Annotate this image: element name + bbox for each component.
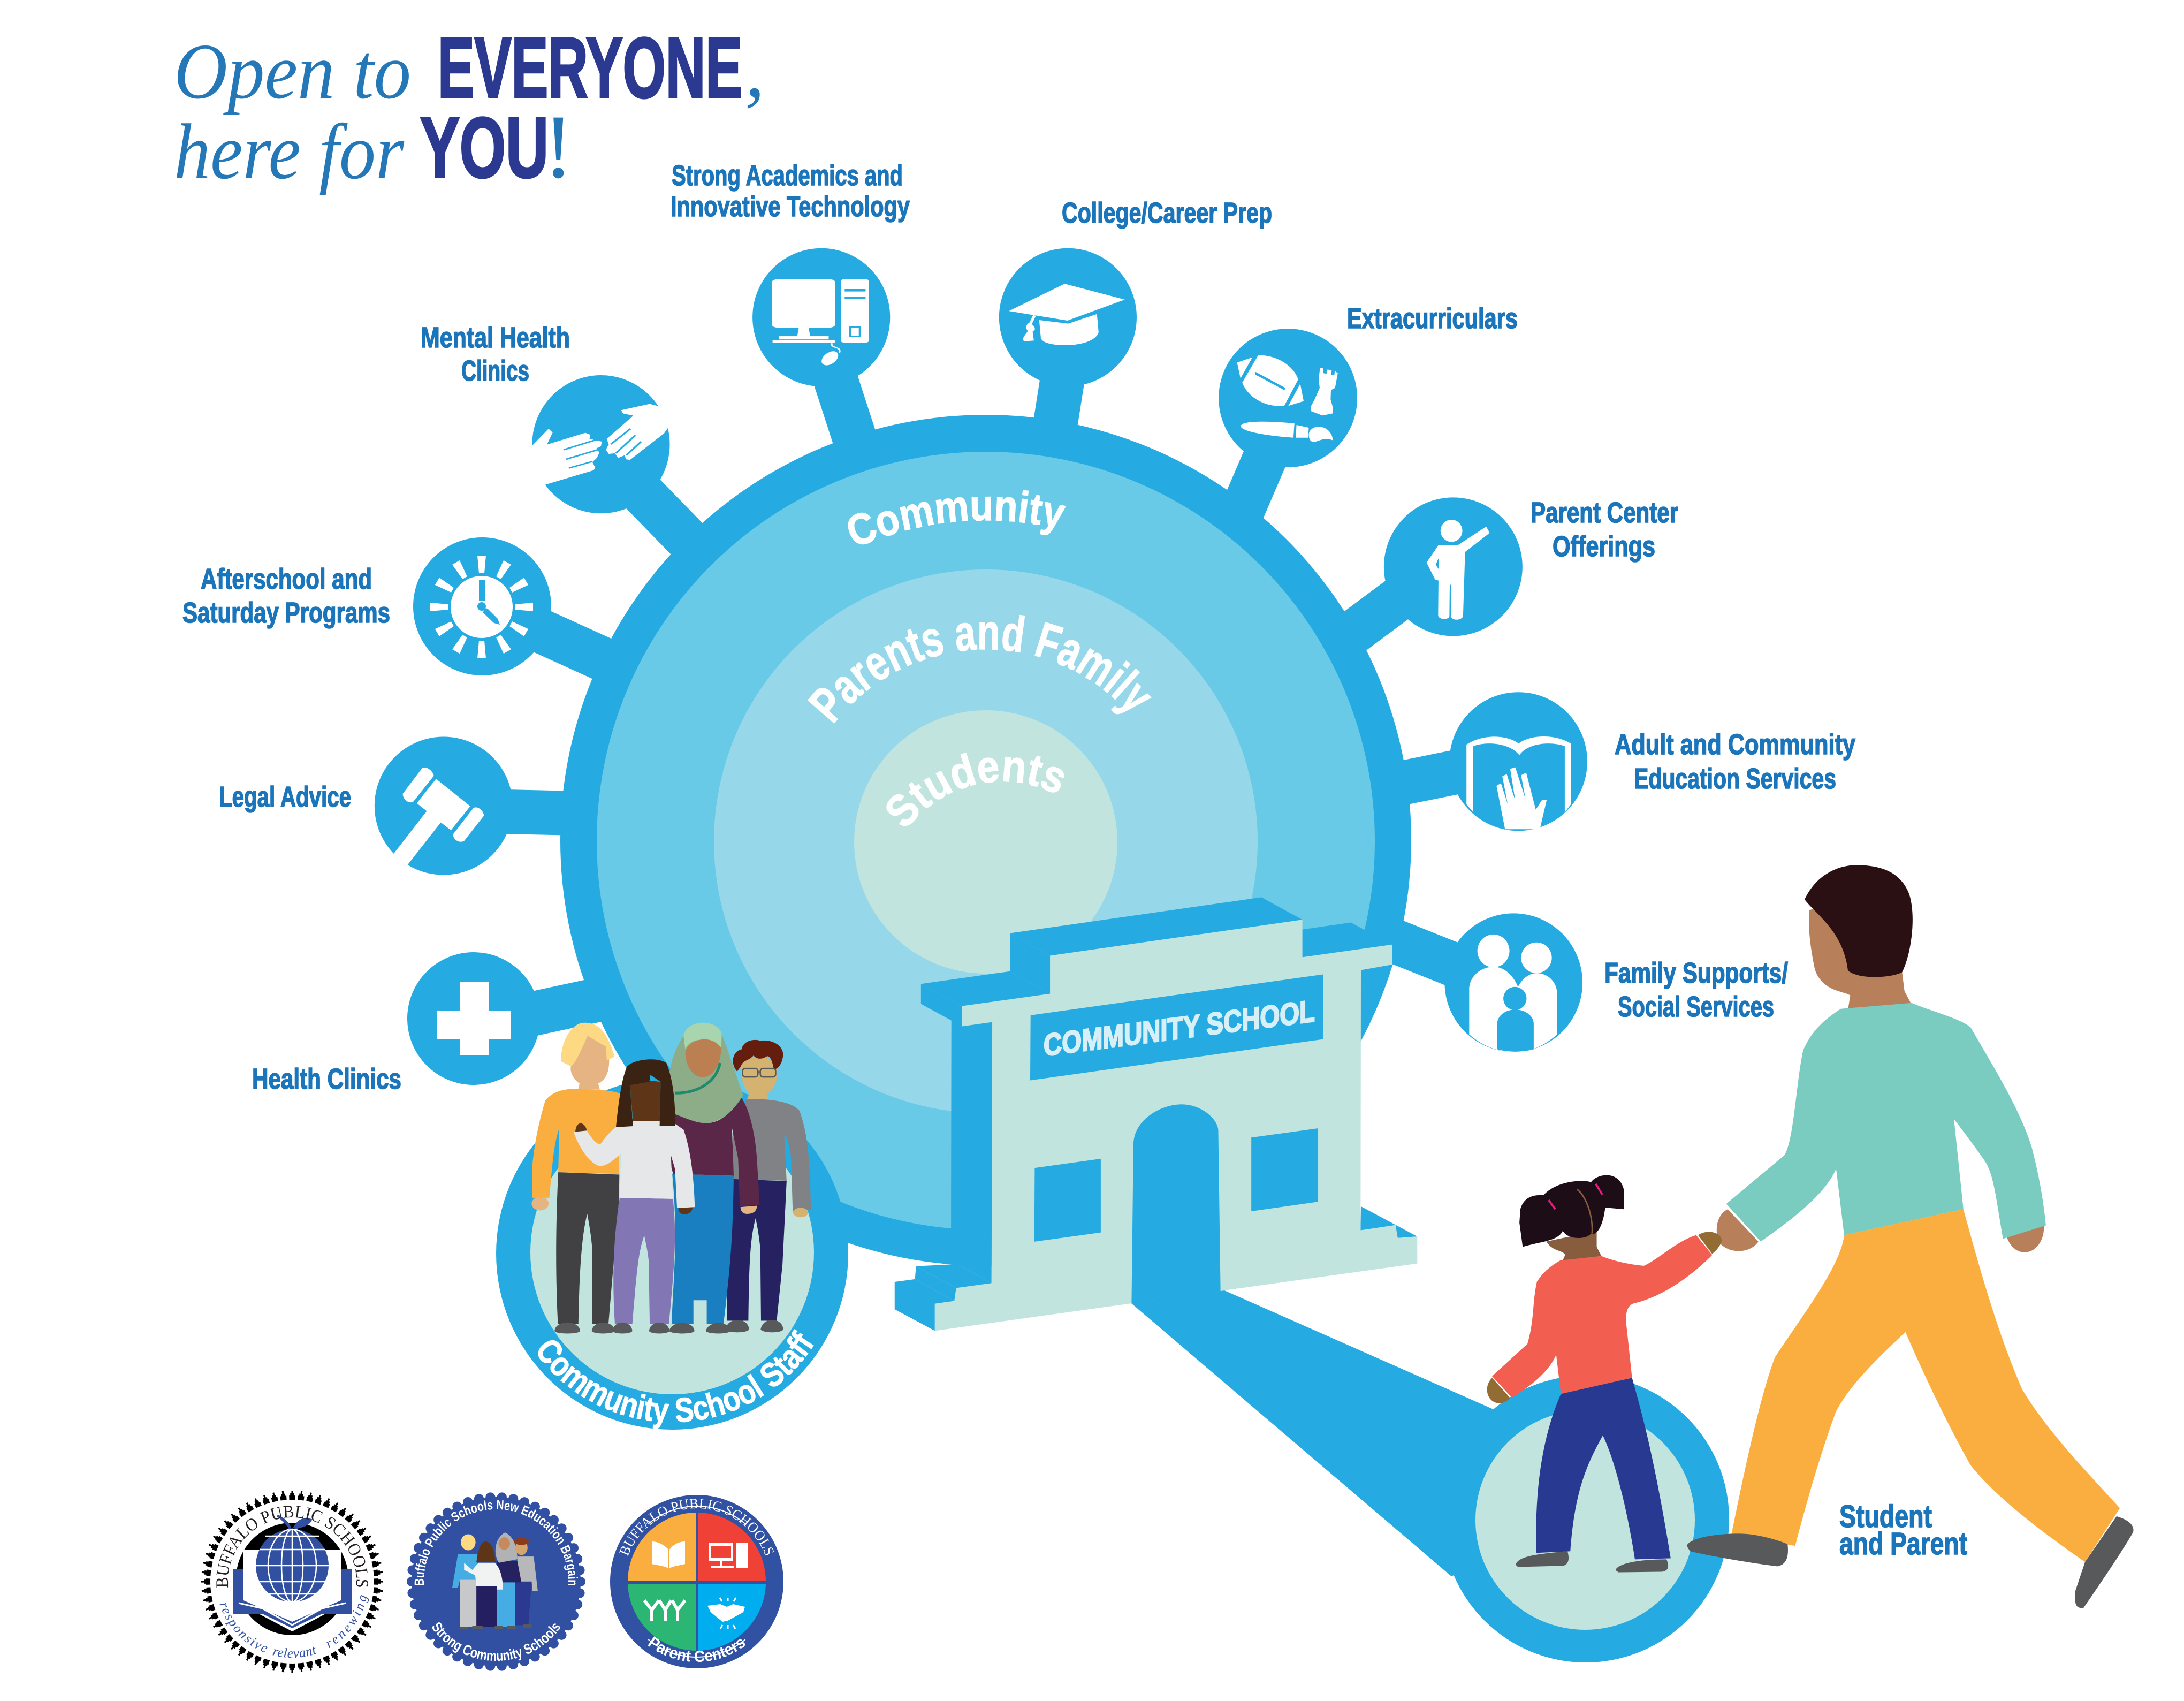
door <box>1131 1104 1221 1303</box>
outer ring <box>560 415 1411 1266</box>
icon: book and hand <box>1466 736 1571 829</box>
label: college career prep: College/Career Prep <box>1062 197 1272 229</box>
seal motto: responsive: responsive <box>219 1603 268 1652</box>
logo: strong community schools <box>407 1492 585 1671</box>
logo text: parent centers: Parent Centers <box>648 1636 745 1662</box>
building sign text: COMMUNITY SCHOOL <box>1044 993 1315 1063</box>
icon: family <box>1469 935 1557 1052</box>
label: strong academics: Strong Academics and <box>672 160 903 192</box>
label: legal advice: Legal Advice <box>219 781 351 813</box>
icon: person pointing <box>1427 520 1490 620</box>
logo text: buffalo public schools: BUFFALO PUBLIC SCHOOLS <box>619 1499 774 1556</box>
community school staff figures <box>531 1023 811 1333</box>
label: adult and community education services <box>1615 728 1855 795</box>
student and parent figures <box>1487 865 2134 1608</box>
title line 1 script: Open to <box>174 28 411 116</box>
icon: computer <box>772 279 869 367</box>
label: mental health clinics: Clinics <box>461 355 529 387</box>
quadrant: handshake <box>698 1584 766 1651</box>
label: student and parent: and Parent <box>1839 1527 1967 1561</box>
building banner <box>1030 974 1323 1081</box>
label: student and parent: Student <box>1839 1499 1932 1534</box>
icon: medical cross <box>437 982 511 1055</box>
community circle <box>597 452 1375 1230</box>
label: adult and community education services: Adult and Community <box>1615 728 1855 761</box>
label: adult and community education services: Education Services <box>1634 763 1836 795</box>
figure: woman in hijab <box>655 1023 759 1333</box>
label: community school staff: Community School Staff <box>538 1329 814 1429</box>
path from door to student circle <box>1131 1290 1586 1576</box>
community school building <box>895 897 1417 1331</box>
building blue side faces <box>895 897 1417 1331</box>
left window <box>1034 1159 1101 1242</box>
icon circle: mental health <box>525 375 670 513</box>
icon circle: family supports <box>1444 913 1582 1052</box>
icon circle: legal advice <box>375 737 513 876</box>
logo text: strong community schools: Strong Community Schools <box>432 1622 560 1661</box>
icon circle: adult and community education <box>1449 692 1587 831</box>
seal text: BUFFALO PUBLIC SCHOOLS <box>216 1506 368 1588</box>
logo: parent centers <box>610 1495 783 1668</box>
staff circle <box>496 1084 848 1430</box>
icon: reaching hands <box>525 404 669 485</box>
logo people <box>452 1532 538 1629</box>
icon circle: academics and technology <box>752 248 890 386</box>
figure: parent <box>1687 865 2134 1608</box>
logo: buffalo public schools seal <box>201 1491 383 1673</box>
concentric circles <box>560 415 1411 1266</box>
icon circle: health clinics <box>407 952 540 1085</box>
label: parent center offerings: Parent Center <box>1531 497 1678 529</box>
student circle <box>1442 1376 1729 1662</box>
title exclamation: ! <box>543 96 574 197</box>
label: student and parent <box>1839 1499 1967 1561</box>
figure: man in gray <box>726 1040 811 1332</box>
label: afterschool <box>182 563 390 629</box>
label: health clinics: Health Clinics <box>252 1063 401 1095</box>
right window <box>1251 1128 1318 1211</box>
seal motto: relevant: relevant <box>272 1646 317 1658</box>
seal motto: renewing: renewing <box>326 1595 369 1648</box>
icon circle: extracurriculars <box>1219 329 1357 467</box>
label: students: Students <box>886 753 1064 826</box>
label: afterschool: Saturday Programs <box>182 597 390 629</box>
quadrant: book <box>628 1513 696 1581</box>
label: strong academics <box>671 160 910 223</box>
figure: student <box>1487 1175 1722 1573</box>
icon: clock <box>430 556 533 658</box>
building front <box>935 920 1417 1331</box>
label: afterschool: Afterschool and <box>201 563 372 595</box>
figure: man in orange <box>531 1023 620 1333</box>
spoke labels <box>182 160 1855 1095</box>
spokes <box>444 335 1518 1027</box>
title line 2 bold: YOU <box>420 100 549 195</box>
title <box>174 20 765 197</box>
label: mental health clinics <box>421 322 570 387</box>
icon circle: afterschool <box>413 537 551 675</box>
parents and family circle <box>714 569 1258 1113</box>
label: strong academics: Innovative Technology <box>671 191 910 223</box>
logo text: bargain: Buffalo Public Schools New Education Bargain <box>414 1500 578 1585</box>
figure: woman in white <box>574 1059 695 1333</box>
title line 1 bold: EVERYONE <box>438 20 742 116</box>
students circle <box>854 710 1117 974</box>
icon: gavel <box>385 768 484 876</box>
title line 2 script: here for <box>174 108 405 196</box>
label: family supports <box>1604 957 1788 1023</box>
label: community: Community <box>848 490 1066 545</box>
quadrant: computer <box>698 1513 766 1581</box>
label: family supports: Social Services <box>1618 991 1774 1023</box>
label: parents and family: Parents and Family <box>807 614 1152 724</box>
icon: graduation cap <box>1009 284 1125 345</box>
quadrant: people <box>628 1584 696 1651</box>
icon circle: college career prep <box>999 248 1137 386</box>
label: mental health clinics: Mental Health <box>421 322 570 354</box>
label: parent center offerings <box>1531 497 1678 563</box>
icon: football, rook and brush <box>1237 355 1338 442</box>
label: extracurriculars: Extracurriculars <box>1347 302 1518 335</box>
icon circle: parent center offerings <box>1384 497 1523 636</box>
title comma: , <box>745 26 765 114</box>
label: family supports: Family Supports/ <box>1604 957 1788 989</box>
label: parent center offerings: Offerings <box>1553 530 1655 563</box>
globe <box>256 1516 329 1602</box>
